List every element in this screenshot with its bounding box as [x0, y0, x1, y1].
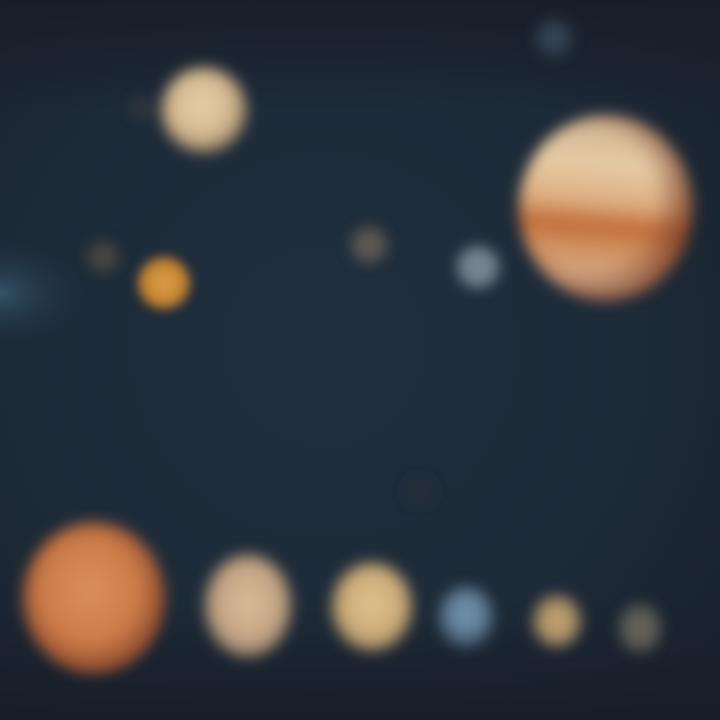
planet: small dim bottom row: [618, 603, 662, 653]
planet: sand bottom row: [331, 562, 413, 652]
planet: large banded giant: [519, 115, 693, 301]
planet: faint blue top right: [537, 21, 571, 55]
planet: cream top left: [130, 67, 247, 153]
planet: very faint lower centre: [407, 478, 433, 504]
planet: small taupe centre: [351, 227, 387, 263]
glow at left edge: [0, 235, 95, 351]
planet: small dim olive: [88, 242, 118, 272]
planet: small grey blue: [457, 246, 499, 288]
planet: beige bottom row: [204, 554, 292, 658]
planet: blue bottom row: [438, 586, 494, 648]
planet: large orange bottom left: [23, 522, 165, 674]
planet: small amber: [137, 256, 191, 310]
planet: small sand bottom row: [532, 594, 582, 648]
